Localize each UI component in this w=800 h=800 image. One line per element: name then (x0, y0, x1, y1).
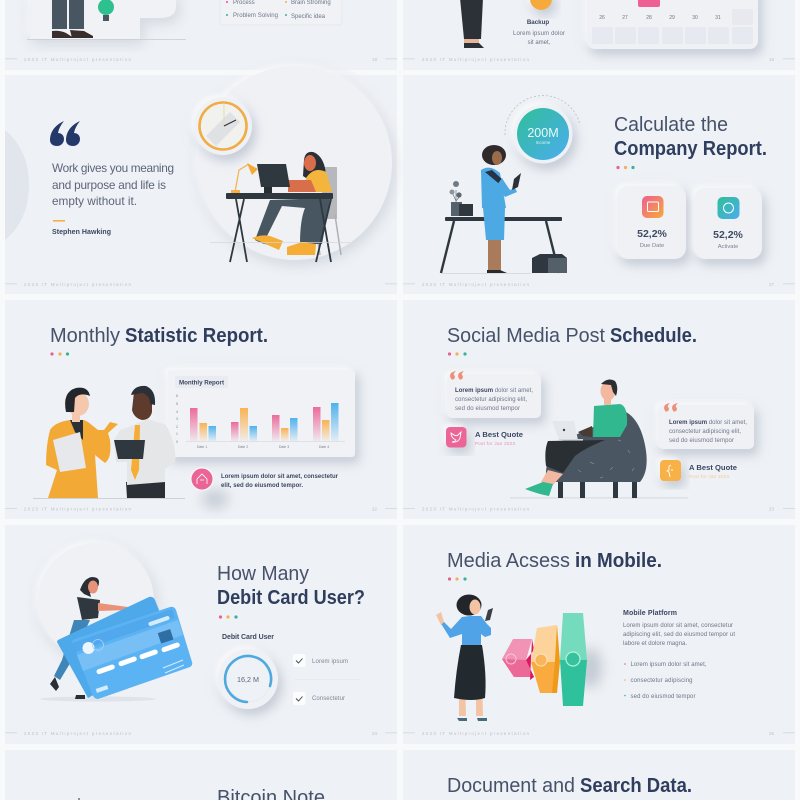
bullet list: Lorem ipsum dolor sit amet, (630, 662, 707, 668)
gauge (218, 649, 278, 709)
heading (217, 563, 365, 609)
calendar: 30 (692, 15, 698, 21)
desk (210, 193, 350, 262)
card: process list: Problem Solving (233, 13, 278, 19)
printer (532, 254, 567, 273)
icon: calendar (642, 196, 664, 218)
footer: 2023 IT Multiproject presentation (422, 731, 530, 736)
illustration: woman at desk (210, 152, 350, 262)
green block (560, 613, 587, 706)
card: process list (220, 0, 342, 25)
neumorphic circle (38, 543, 154, 659)
plant and box (450, 181, 473, 216)
monitor and lamp (231, 163, 290, 193)
footer: 18 (372, 57, 377, 62)
calendar: 27 (622, 15, 628, 21)
decorative half circle (5, 130, 29, 240)
x axis labels: Date 4 (319, 445, 329, 449)
x axis labels: Date 2 (238, 445, 248, 449)
card: activate: 52,2% (713, 229, 744, 241)
quote text: Work gives you meaning (52, 161, 174, 175)
table (441, 217, 562, 274)
clock (194, 97, 252, 155)
orange block (531, 625, 560, 693)
income gauge: 200M (527, 126, 559, 140)
footer: 22 (372, 506, 377, 512)
footer: 2023 IT Multiproject presentation (422, 506, 530, 512)
person legs (27, 0, 186, 40)
footer: 27 (769, 282, 774, 287)
icon: chat (718, 197, 740, 219)
chart card (168, 370, 355, 457)
quote card left (447, 371, 541, 418)
bullet list: sed do eiusmod tempor (630, 694, 696, 700)
text block: Lorem ipsum dolor sit amet, consectetur (623, 623, 733, 629)
backup text: sit amet, (528, 40, 551, 46)
text block: adipiscing elit, sed do eiusmod tempor ut (623, 632, 735, 638)
y axis labels: 0 (176, 440, 178, 444)
card: activate: Activate (718, 244, 738, 250)
checklist: Consectetur (312, 696, 345, 702)
panel: top-right slide remnant (403, 0, 795, 70)
illustration: man in armchair (510, 380, 688, 498)
callout (190, 467, 339, 509)
woman (46, 388, 118, 498)
quote card left: Lorem ipsum dolor sit amet, (455, 388, 533, 394)
quote card right (658, 403, 754, 449)
x axis labels: Date 1 (197, 445, 207, 449)
footer: 23 (769, 506, 774, 512)
footer (403, 506, 795, 512)
panel: monthly statistic slide (5, 300, 397, 519)
calendar: 28 (646, 15, 652, 21)
heading: Search Data. (580, 775, 692, 797)
laptop (552, 421, 583, 441)
calendar: 29 (669, 15, 675, 21)
heading: Schedule. (610, 325, 697, 347)
callout: elit, sed do eiusmod tempor. (221, 483, 303, 489)
chair (546, 412, 647, 482)
label: A Best Quote (689, 463, 737, 472)
panel: debit card slide (5, 525, 397, 744)
heading (50, 325, 268, 347)
heading (447, 775, 692, 797)
heading: Debit Card User? (217, 587, 365, 609)
dots (616, 166, 635, 169)
icon: quote mark (50, 121, 80, 146)
backup text: Backup (527, 19, 549, 26)
leg and shoe (525, 470, 563, 496)
footer (403, 282, 795, 287)
card: due date: Due Date (640, 243, 664, 249)
calendar: 31 (715, 15, 721, 21)
illustration: woman at table (441, 145, 567, 274)
label: Post for Jan 2023 (475, 441, 515, 446)
illustration: two colleagues (33, 386, 185, 499)
icon: twitter (446, 427, 466, 448)
dots (50, 352, 69, 356)
heading: Media Acsess (447, 550, 570, 572)
icon: light bulb (98, 0, 114, 21)
footer: 2023 IT Multiproject presentation (24, 57, 132, 62)
chart title: Monthly Report (179, 380, 224, 386)
footer: 19 (769, 57, 774, 62)
card: due date: 52,2% (637, 228, 668, 240)
woman (481, 145, 521, 273)
quote card left: consectetur adipiscing elit, (455, 397, 527, 403)
label (475, 430, 523, 446)
footer (5, 57, 397, 62)
heading: How Many (217, 563, 309, 585)
chair (300, 167, 341, 255)
man (114, 386, 175, 498)
quote author (52, 220, 111, 236)
heading: Social Media Post (447, 325, 605, 347)
footer (403, 57, 795, 62)
footer: 25 (769, 731, 774, 736)
shorts (545, 440, 605, 473)
gauge: 16,2 M (237, 675, 259, 684)
text block (623, 610, 735, 647)
icon: backup (530, 0, 552, 10)
shirt (593, 404, 627, 437)
calendar: 26 (599, 15, 605, 21)
panel: company report slide (403, 75, 795, 294)
heading: Document and (447, 775, 575, 797)
label: Post for Jan 2023 (689, 474, 729, 479)
y axis labels: 4 (176, 410, 178, 414)
panel: social media slide (403, 300, 795, 519)
y axis labels: 1 (176, 432, 178, 436)
label (689, 463, 737, 479)
dots (448, 577, 467, 581)
quote marks (664, 403, 678, 412)
arm (578, 426, 592, 437)
quote text: empty without it. (52, 194, 137, 208)
debit cards (57, 597, 192, 699)
income gauge (505, 96, 580, 164)
card: due date (617, 186, 686, 259)
income gauge: Income (536, 140, 551, 145)
person legs (460, 0, 484, 48)
neumorphic head shape (30, 0, 176, 39)
head (600, 380, 617, 405)
footer (5, 506, 397, 512)
bullet list: consectetur adipiscing (630, 678, 692, 684)
footer: 2023 IT Multiproject presentation (24, 731, 132, 736)
panel: quote slide (5, 61, 397, 294)
woman with phone (436, 594, 493, 721)
3D blocks (502, 613, 602, 706)
backup text (513, 19, 565, 46)
quote card right: consectetur adipiscing elit, (669, 429, 741, 435)
footer (5, 731, 397, 736)
neumorphic circles (198, 61, 392, 260)
checklist: Lorem ipsum (312, 659, 348, 665)
y axis labels (176, 394, 178, 444)
quote text (52, 161, 174, 208)
backup text: Lorem ipsum dolor (513, 31, 565, 37)
quote marks (450, 371, 464, 380)
heading: Monthly (50, 325, 120, 347)
panel: bitcoin note slide remnant (5, 750, 397, 800)
x axis labels: Date 3 (279, 445, 289, 449)
y axis labels: 5 (176, 402, 178, 406)
heading (447, 550, 662, 572)
dots (219, 615, 238, 619)
footer: 2023 IT Multiproject presentation (24, 506, 132, 512)
heading: Company Report. (614, 138, 767, 160)
y axis labels: 3 (176, 417, 178, 421)
dots (448, 352, 467, 356)
chair legs (558, 481, 637, 498)
calendar (587, 0, 758, 49)
heading: Statistic Report. (125, 325, 268, 347)
y axis labels: 2 (176, 425, 178, 429)
heading (447, 325, 697, 347)
text block: labore et dolore magna. (623, 641, 687, 647)
panel: top-left slide remnant (5, 0, 397, 70)
bullet list (624, 662, 707, 700)
footer: 2023 IT Multiproject presentation (422, 282, 530, 287)
ground (510, 496, 688, 499)
panel: media access slide (403, 525, 795, 744)
quote author: Stephen Hawking (52, 229, 111, 236)
quote text: and purpose and life is (52, 178, 166, 192)
y axis labels: 6 (176, 394, 178, 398)
quote card right: Lorem ipsum dolor sit amet, (669, 420, 747, 426)
card: process list: Process (233, 0, 255, 6)
text block: Mobile Platform (623, 610, 677, 617)
heading: Calculate the (614, 114, 728, 136)
quote card right: sed do eiusmod tempor (669, 438, 734, 444)
callout: Lorem ipsum dolor sit amet, consectetur (221, 474, 339, 480)
footer: 24 (372, 731, 377, 736)
chart title (175, 376, 228, 388)
footer: 2023 IT Multiproject presentation (24, 282, 132, 287)
icon: facebook (660, 460, 681, 481)
heading (614, 114, 767, 160)
woman (252, 152, 332, 255)
footer (403, 731, 795, 736)
x axis labels (197, 445, 329, 449)
heading: in Mobile. (575, 550, 662, 572)
pink block (502, 639, 534, 680)
card: process list: Specific idea (291, 14, 326, 20)
quote card left: sed do eiusmod tempor (455, 406, 520, 412)
footer: 2023 IT Multiproject presentation (422, 57, 530, 62)
bar chart (186, 403, 345, 442)
card: process list: Brain Stroming (291, 0, 331, 6)
card: activate (694, 188, 762, 259)
panel: document slide remnant (403, 750, 795, 800)
ground shadow (40, 696, 156, 702)
subheading: Debit Card User (222, 634, 274, 641)
woman (50, 577, 128, 699)
checklist (293, 654, 361, 705)
label: A Best Quote (475, 430, 523, 439)
